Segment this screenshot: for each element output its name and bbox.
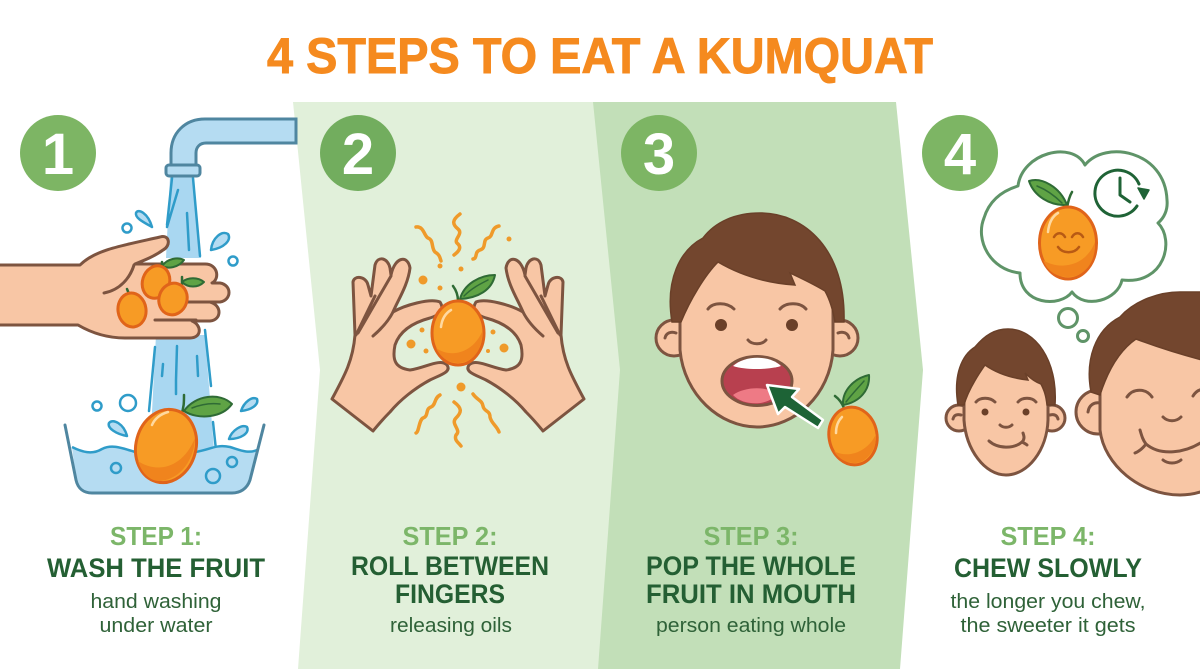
icon: water tap [166,119,296,176]
step 1 caption: WASH THE FRUIT [47,553,265,583]
icon: water stream [149,176,216,450]
icon: water splash drops [92,211,257,439]
icon: clock with arrow [1095,170,1149,216]
step 3 number badge [621,115,697,191]
panel: step 3 background [593,102,923,669]
step 2 caption: releasing oils [390,615,512,637]
step 3 caption: POP THE WHOLE [646,551,856,581]
panel: step 3 pop in mouth [621,115,882,637]
step 4 caption: the sweeter it gets [960,615,1136,637]
step 1 caption: STEP 1: [110,521,202,551]
thought bubble [981,152,1167,342]
icon: large kumquat [127,395,232,490]
icon: small chewing face [946,329,1065,475]
step 1 number badge: 1 [42,122,74,187]
icon: large chewing face [1076,292,1200,495]
step 1 caption [47,521,265,637]
step 2 caption: STEP 2: [402,521,498,551]
step 2 number badge [320,115,396,191]
step 4 caption [950,521,1146,637]
icon: whole kumquat beside mouth [824,375,882,469]
icon: basin of water [65,425,264,493]
step 4 number badge: 4 [944,122,976,187]
step 1 caption: hand washing [90,591,222,613]
icon: right hand [468,259,584,431]
step 4 caption: the longer you chew, [950,591,1146,613]
small kumquat, centre [138,258,184,302]
step 3 caption [646,521,856,637]
hair [957,329,1055,405]
step 1 caption: under water [100,615,213,637]
step 3 caption: FRUIT IN MOUTH [646,579,856,609]
step 3 caption: STEP 3: [704,521,798,551]
step 1 number badge [20,115,96,191]
step 2 caption [351,521,549,637]
arrow into mouth [767,385,823,428]
open mouth [722,356,792,406]
icon: oil squiggles and droplets [406,214,512,446]
panel: step 4 chew [922,115,1200,637]
title: 4 STEPS TO EAT A KUMQUAT [267,28,933,84]
step 2 number badge: 2 [342,122,374,187]
step 4 caption: STEP 4: [1000,521,1096,551]
icon: hand holding kumquats [0,237,229,338]
icon: kumquat between fingers [432,275,495,365]
step 4 number badge [922,115,998,191]
small kumquat, fingers [155,277,204,319]
icon: left hand [332,259,448,431]
panel: step 2 roll [320,115,584,637]
step 2 caption: ROLL BETWEEN [351,551,549,581]
panel: step 2 background [293,102,621,669]
step 2 caption: FINGERS [395,579,505,609]
step 4 caption: CHEW SLOWLY [954,553,1142,583]
icon: smiling kumquat [1029,180,1096,279]
step 3 number badge: 3 [643,122,675,187]
hair [670,213,844,322]
panel: step 1 wash [0,115,296,637]
icon: open-mouthed face [656,213,858,427]
step 3 caption: person eating whole [656,615,846,637]
small kumquat, palm [116,289,148,329]
hair [1089,292,1200,395]
